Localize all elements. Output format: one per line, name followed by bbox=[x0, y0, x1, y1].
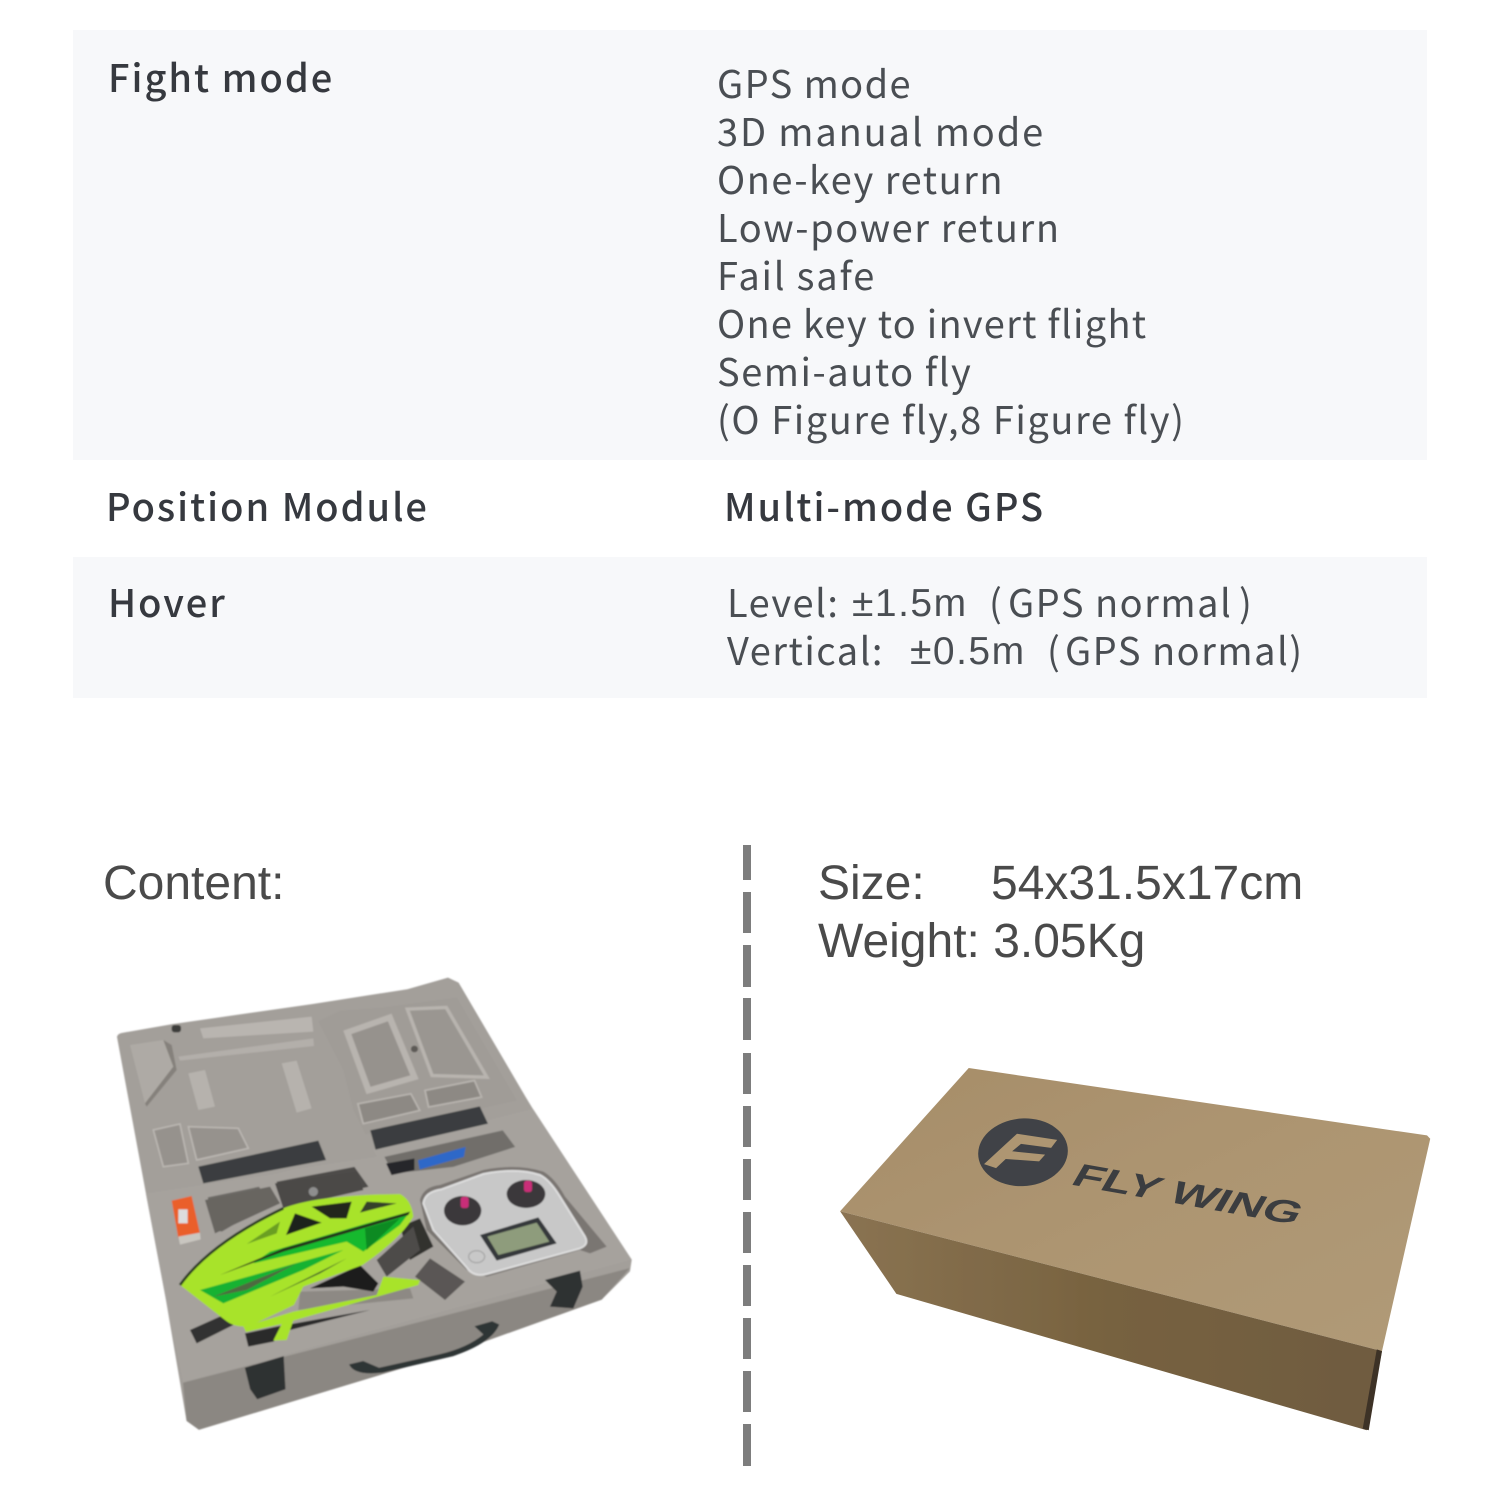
transmitter body bbox=[423, 1171, 586, 1275]
box front face bbox=[840, 1211, 1382, 1430]
lid left moulding bbox=[125, 1012, 377, 1183]
transmitter well and foam pockets bbox=[420, 1167, 607, 1277]
text: hover values: ) bbox=[1239, 573, 1253, 628]
text: fight mode list: One key to invert flight bbox=[717, 294, 1147, 349]
text: weight: Weight: 3.05Kg bbox=[818, 915, 1145, 968]
text: size: Size: bbox=[818, 857, 925, 910]
text: fight mode list: 3D manual mode bbox=[717, 102, 1045, 157]
text: size bbox=[818, 857, 1303, 910]
label: fight mode: Fight mode bbox=[108, 48, 334, 103]
foam case body bbox=[117, 978, 632, 1430]
transmitter bbox=[400, 1167, 607, 1308]
lid recess right bbox=[312, 998, 517, 1147]
carry handle bbox=[349, 1321, 499, 1373]
orange battery bbox=[172, 1196, 200, 1238]
right dark rail bbox=[370, 1106, 488, 1150]
value: position module: Multi-mode GPS bbox=[724, 477, 1045, 532]
text: fight mode list: Semi-auto fly bbox=[717, 342, 972, 397]
cavities bbox=[208, 1187, 270, 1232]
text: hover values bbox=[727, 573, 1304, 676]
text: hover values: GPS normal bbox=[1008, 573, 1232, 628]
mechanics and shadows bbox=[205, 1187, 280, 1233]
text: 54x31.5x17cm bbox=[991, 857, 1303, 910]
image: cardboard box with Fly Wing logo bbox=[840, 1068, 1430, 1430]
helicopter and battery bbox=[172, 1172, 420, 1347]
label: hover: Hover bbox=[108, 573, 227, 628]
dark skid mount bbox=[310, 1265, 378, 1292]
panel: fight mode row bbox=[73, 30, 1427, 460]
text: hover values: Level: bbox=[727, 573, 839, 628]
left latch bbox=[245, 1356, 285, 1399]
right latch bbox=[545, 1271, 583, 1308]
canopy bbox=[180, 1194, 413, 1327]
text: fight mode list: GPS mode bbox=[717, 54, 912, 109]
dashed divider bbox=[743, 845, 751, 1466]
logo badge bbox=[971, 1111, 1075, 1193]
blue servo lead bbox=[418, 1147, 466, 1169]
text: fight mode list: (O Figure fly,8 Figure fly) bbox=[717, 390, 1185, 445]
text: hover values: ( bbox=[1047, 621, 1061, 676]
text: fight mode list: Low-power return bbox=[717, 198, 1061, 253]
text: hover values: GPS normal) bbox=[1065, 621, 1304, 676]
box top face bbox=[840, 1068, 1430, 1351]
screen bbox=[480, 1217, 557, 1261]
text: hover values: ( bbox=[989, 573, 1003, 628]
label: position module: Position Module bbox=[106, 477, 429, 532]
text: fight mode list: Fail safe bbox=[717, 246, 876, 301]
panel: hover row bbox=[73, 557, 1427, 698]
text: hover values: ±1.5m bbox=[852, 582, 968, 625]
text: hover values: Vertical: bbox=[727, 621, 884, 676]
control sticks bbox=[444, 1196, 481, 1225]
text: fight mode list: One-key return bbox=[717, 150, 1004, 205]
text: hover values: ±0.5m bbox=[910, 630, 1026, 673]
heading: content: Content: bbox=[103, 857, 284, 910]
logo wordmark: FLY WING bbox=[1065, 1157, 1311, 1231]
canopy windows bbox=[286, 1213, 322, 1235]
image: foam case with helicopter and transmitter bbox=[117, 978, 632, 1430]
text: fight mode list bbox=[717, 54, 1185, 445]
canopy stripes bbox=[253, 1212, 410, 1263]
landing skid bbox=[243, 1277, 420, 1341]
